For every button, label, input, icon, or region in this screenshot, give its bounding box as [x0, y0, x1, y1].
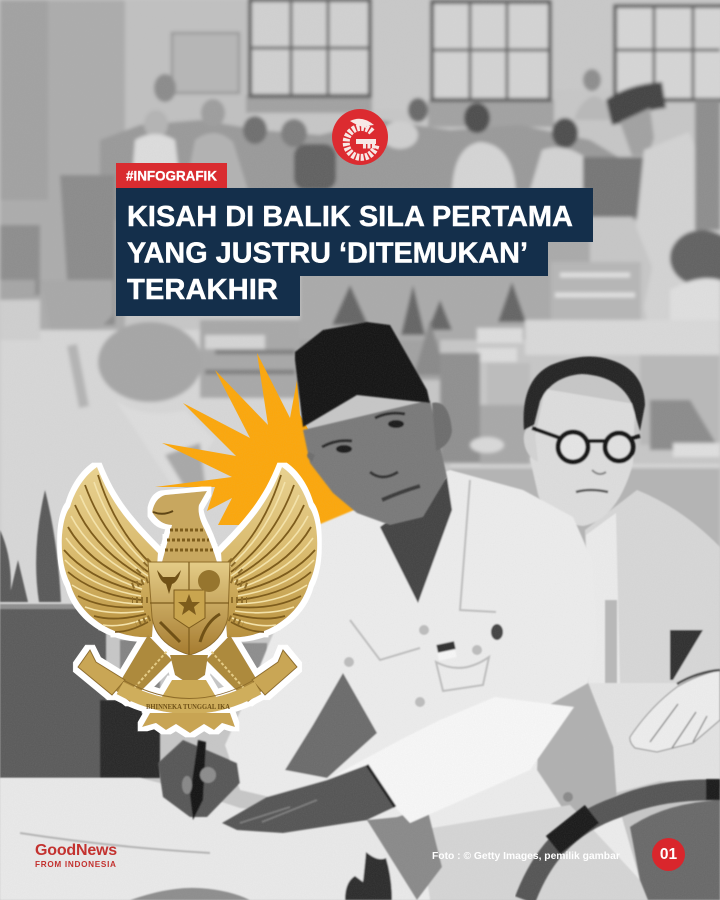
standing man with fez [583, 82, 720, 370]
Hatta head [530, 389, 635, 526]
collar lines and pocket [350, 480, 496, 691]
forearm sleeve [330, 697, 574, 823]
right wing [221, 467, 317, 637]
table with desk signs [300, 190, 590, 340]
title block: YANG JUSTRU ‘DITEMUKAN’ [127, 238, 528, 270]
centre body and tail [170, 655, 208, 685]
logo badge [332, 109, 388, 165]
left wing [62, 467, 158, 637]
window left [246, 0, 372, 113]
fez [295, 322, 430, 427]
Hatta: suit, head and document [524, 356, 720, 793]
tag: infografik [116, 163, 227, 188]
Hatta hand [630, 670, 720, 752]
legs [115, 635, 263, 702]
pen hand [158, 740, 240, 817]
head and neck [152, 491, 217, 562]
gap between arm and body [285, 673, 377, 778]
window centre [428, 2, 554, 127]
title block: KISAH DI BALIK SILA PERTAMA [127, 201, 573, 233]
forearm hand [222, 765, 395, 833]
shield [148, 562, 230, 655]
Hatta document [588, 683, 720, 793]
garuda pancasila emblem [62, 467, 317, 733]
plant and dark chair at left [0, 490, 267, 778]
page number: 01 [660, 846, 677, 863]
brand logo: GoodNews: FROM INDONESIA [35, 860, 117, 869]
Sukarno: head and fez [295, 322, 452, 525]
brand logo: GoodNews: GoodNews [35, 842, 117, 859]
page number [652, 838, 685, 871]
Hatta suit [585, 490, 720, 687]
left foreground: wall and hat [0, 330, 300, 610]
Sukarno: body and arms [158, 470, 648, 900]
flag pin and badge [436, 624, 503, 661]
neck [380, 477, 452, 603]
garuda pancasila emblem: BHINNEKA TUNGGAL IKA [146, 703, 230, 711]
glasses [532, 428, 640, 462]
tag: infografik: #INFOGRAFIK [126, 168, 217, 184]
shirt [225, 470, 648, 900]
photo credit: Foto : © Getty Images, pemilik gambar [432, 851, 620, 862]
title block [116, 188, 593, 316]
brand logo: GoodNews [35, 842, 117, 869]
seated delegates [100, 69, 640, 220]
lower tail [142, 713, 235, 733]
motto scroll [78, 650, 297, 695]
window right [615, 6, 720, 100]
orange sunburst [155, 353, 356, 525]
steering-wheel shape and dark corner [525, 779, 720, 900]
title block: TERAKHIR [127, 274, 278, 306]
table cloth [0, 778, 417, 900]
